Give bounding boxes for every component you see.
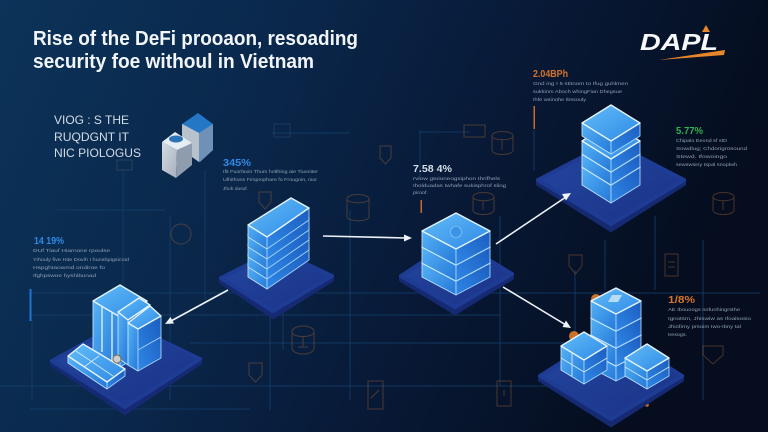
platform: top-right stack	[538, 105, 684, 230]
stat: 1/8%: tresogs.	[668, 332, 687, 338]
stat: 1/8%: Jhiofirny prsoim Iwo-Ibny tal	[668, 324, 741, 330]
icon: shield	[703, 346, 723, 364]
subheading: NIC PIOLOGUS	[54, 146, 141, 160]
cluster: left servers	[68, 285, 161, 389]
stat: 5.77%: Sowdlug; Chdorigrosound	[676, 146, 747, 152]
icon: cylinder	[713, 192, 734, 214]
stat: 345%: 345%	[223, 158, 251, 169]
icon: faint panel	[274, 124, 290, 137]
title: security foe withoul in Vietnam	[33, 51, 314, 73]
arrow: centre-left to centre	[323, 234, 412, 242]
subheading: RUQDGNT IT	[54, 130, 130, 144]
icon: panel	[464, 125, 485, 137]
stat: 7.58 4%: rviow gtoioneogsiphon thrifhels	[413, 176, 501, 182]
stack: five layers	[248, 198, 309, 289]
stat: 1/8%: Ignotsm, Jhiswiw as Ifoalsosio	[668, 316, 751, 322]
stat: 5.77%: Stewd. Ifowoingo	[676, 154, 727, 160]
stack: four layers	[582, 105, 640, 203]
stat: 14 19%: 14 19%	[34, 236, 64, 247]
logo: DAPL	[640, 29, 718, 55]
icon: orange dot	[645, 403, 649, 407]
cluster: tower and boxes	[561, 288, 669, 389]
stat: 14 19%: DUf Tiauf Hiarnone rpoulse	[33, 248, 110, 254]
icon: cylinder	[492, 132, 513, 154]
stat: 5.77%: sewswsiny Ispal snoplwh	[676, 162, 737, 168]
stat: 345%: Ulhithons Firsprophare fo Frougnin, nior	[223, 177, 317, 183]
stat: 2.04%: Gnd ing I 5 stitnom to Ifug guhlmen	[533, 81, 628, 87]
stat: 14 19%: Yihouly five Hite Dovih I hunshpigsicoid	[33, 257, 129, 263]
icon: document	[497, 381, 511, 406]
stat: 1/8%: 1/8%	[668, 294, 696, 306]
icon: cylinder	[347, 194, 369, 221]
stat: 5.77%: 5.77%	[676, 126, 703, 137]
stat: 14 19%	[33, 236, 129, 279]
stat: 7.58 4%: 7.58 4%	[413, 164, 452, 175]
stat: 1/8%: AE Ibouoogs nofunhingrsthe	[668, 307, 740, 313]
icon: orange disc behind box	[569, 331, 579, 341]
logo	[640, 25, 725, 60]
orange marker line	[534, 106, 535, 129]
stat: 345%	[223, 158, 318, 192]
icon: shield	[380, 146, 391, 164]
stat: 2.04%: 2.04BPh	[533, 69, 568, 80]
title	[33, 28, 358, 73]
icon: circle	[171, 224, 191, 244]
arrow: centre-left to left cluster	[165, 290, 228, 324]
stat: 14 19%: Ifghpswoe hyshibunad	[33, 273, 96, 279]
stack: three layers	[422, 213, 490, 295]
icon: document	[368, 381, 383, 409]
icon: orange disc behind tower	[591, 294, 601, 304]
arrow: centre to bottom-right	[503, 287, 571, 328]
stat: 2.04%	[533, 69, 628, 103]
stat: 2.04%: Ihfe wsinohe Ibssouly	[533, 97, 587, 103]
arrow: centre to top-right	[496, 193, 571, 244]
icon: shield	[249, 363, 262, 382]
platform: left cluster	[52, 285, 200, 413]
platform: bottom-right cluster	[540, 288, 682, 425]
stat: 2.04%: sukkinm Aboch whingFian Dhegsue	[533, 89, 622, 95]
icon: document	[665, 254, 678, 276]
icon: shield	[569, 255, 582, 274]
subheading	[54, 113, 141, 160]
stat: 7.58 4%: Iholduadas Iwhafe sukisphrof sling	[413, 183, 506, 189]
stat: 7.58 4%	[413, 164, 506, 196]
stat: 7.58 4%: piroof.	[413, 190, 428, 196]
stat: 5.77%: Chipalo Eeond sf stD	[676, 138, 728, 144]
stat: 5.77%	[676, 126, 747, 168]
icon: server towers	[162, 113, 213, 178]
icon: cylinder	[292, 326, 314, 354]
icon: cylinder	[473, 192, 494, 214]
platform: centre-left stack	[221, 198, 332, 317]
stat: 1/8%	[668, 294, 751, 338]
orange marker line	[420, 200, 422, 213]
stat: 345%: Jhuh dusof.	[223, 186, 248, 192]
circuit background	[0, 124, 760, 410]
icon: faint panel	[117, 160, 132, 170]
icon: shield	[259, 192, 271, 209]
stat: 14 19%: Hspghtaowmd ondiroe fo	[33, 265, 105, 271]
stat: 345%: Ifit Fuorfavin Thum holthing aie Tiuoniter	[223, 169, 318, 175]
subheading: VIOG : S THE	[54, 113, 129, 127]
blue marker line	[30, 289, 32, 321]
title: Rise of the DeFi prooaon, resoading	[33, 28, 358, 50]
platform: centre stack	[401, 213, 512, 313]
